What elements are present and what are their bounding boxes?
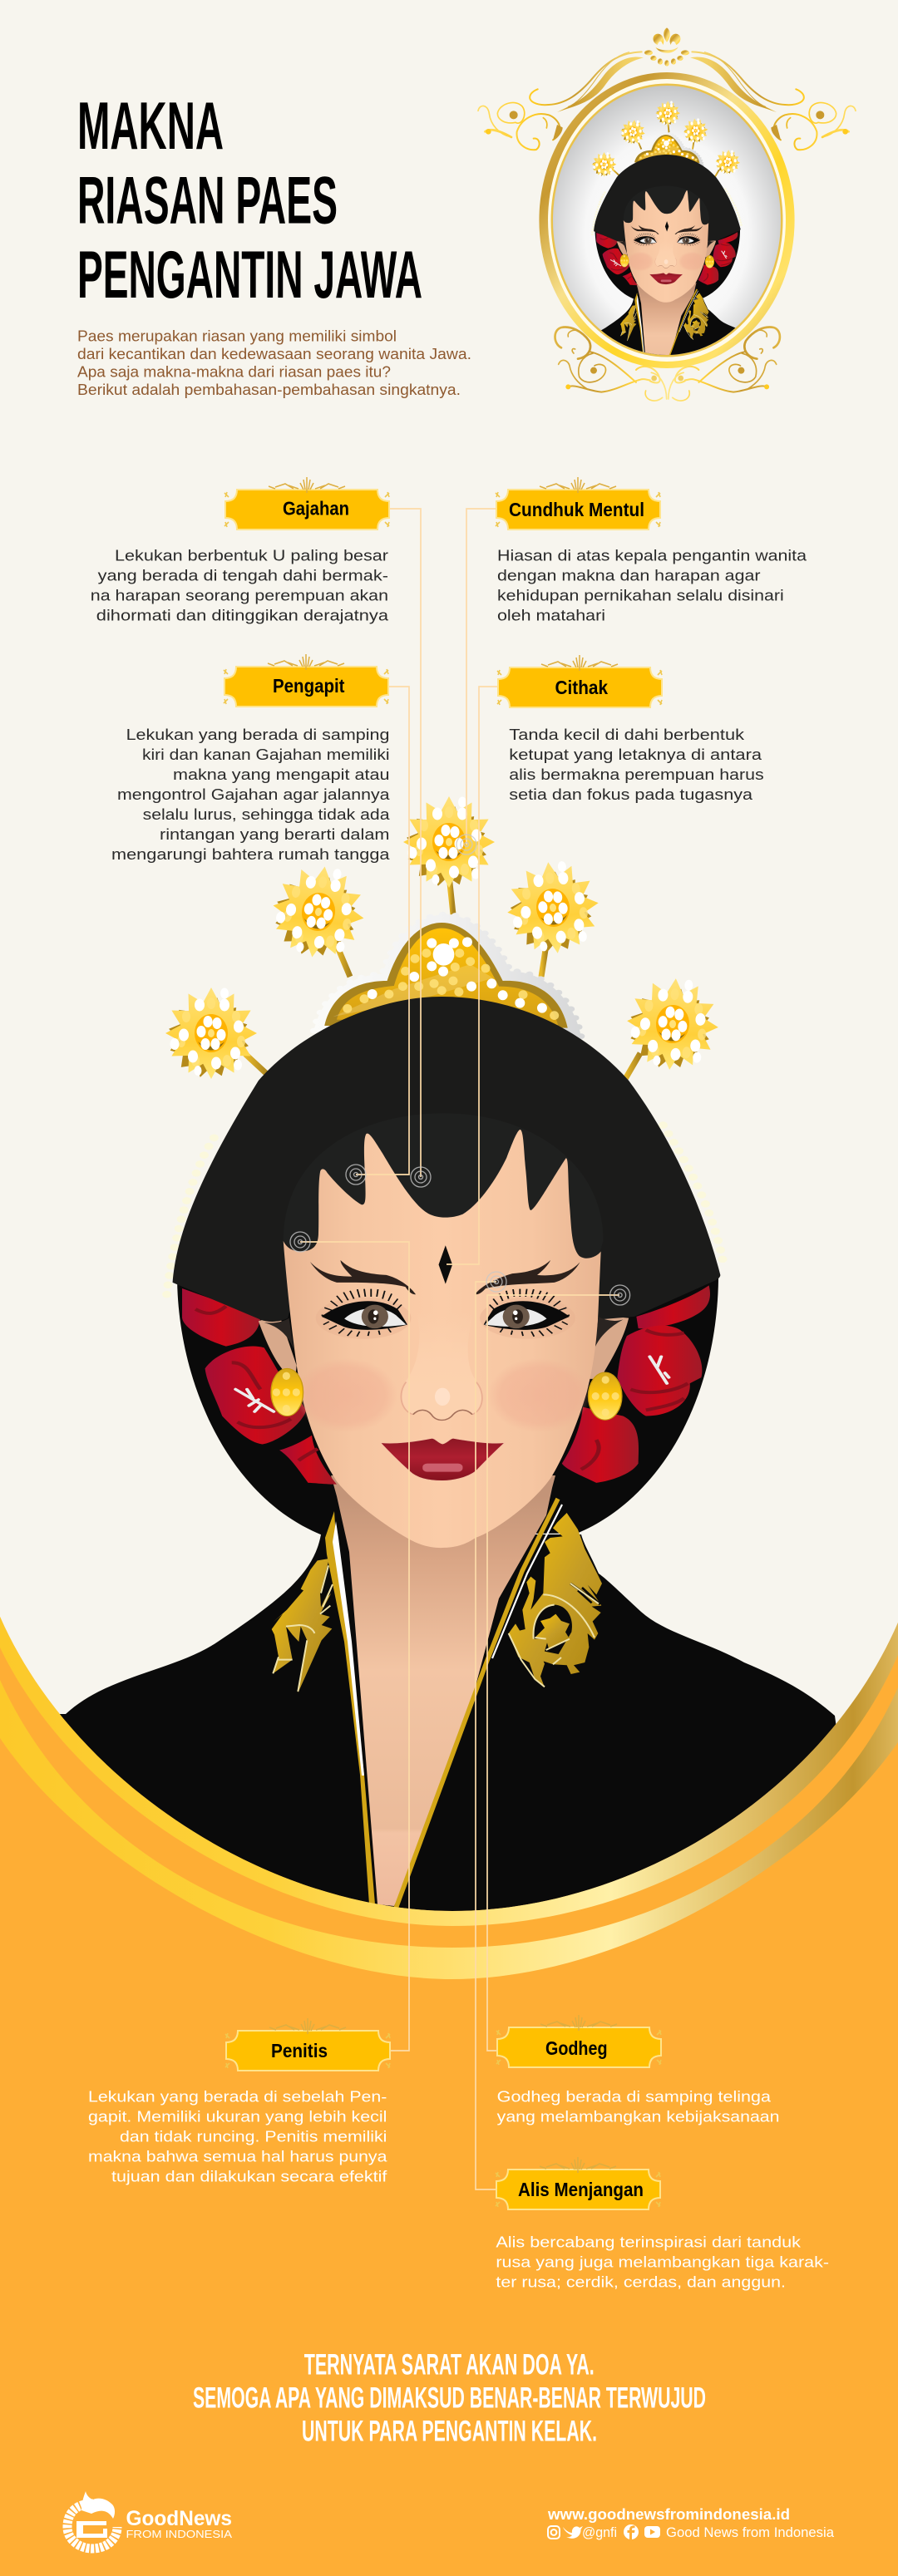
hair ornaments white xyxy=(235,1357,669,1411)
kebaya body xyxy=(33,1534,865,1945)
logo text: GoodNews xyxy=(126,2507,232,2530)
penitis text: tujuan dan dilakukan secara efektif xyxy=(111,2168,387,2184)
back hair bun xyxy=(177,1273,718,1534)
alis menjangan badge xyxy=(496,2157,660,2209)
gajahan text: dihormati dan ditinggikan derajatnya xyxy=(96,607,389,624)
cithak badge: Cithak xyxy=(555,677,608,698)
pale beads behind hair xyxy=(167,1125,724,1294)
godheg badge: Godheg xyxy=(545,2037,607,2059)
alis menjangan text: rusa yang juga melambangkan tiga karak- xyxy=(496,2253,829,2271)
oval portrait frame xyxy=(478,27,856,409)
penitis text: Lekukan yang berada di sebelah Pen- xyxy=(88,2088,387,2105)
footer links: @gnfi xyxy=(582,2524,617,2540)
gold crown xyxy=(313,914,581,1037)
godheg text: Godheg berada di samping telinga xyxy=(497,2088,772,2105)
title: PENGANTIN JAWA xyxy=(77,238,422,313)
pengapit text: Lekukan yang berada di samping xyxy=(126,726,389,743)
panel: godheg xyxy=(496,2015,780,2125)
cundhuk mentul badge: Cundhuk Mentul xyxy=(509,499,644,520)
alis menjangan text: ter rusa; cerdik, cerdas, dan anggun. xyxy=(496,2273,786,2291)
gajahan text: na harapan seorang perempuan akan xyxy=(91,587,388,604)
godheg text: yang melambangkan kebijaksanaan xyxy=(497,2108,780,2125)
headdress stems xyxy=(245,875,640,1079)
cundhuk mentul badge xyxy=(496,477,660,529)
gold collar embroidery xyxy=(272,1513,602,1693)
alis menjangan text xyxy=(496,2234,829,2291)
cithak text xyxy=(509,726,764,803)
panel: alis menjangan xyxy=(496,2157,829,2291)
closing message: UNTUK PARA PENGANTIN KELAK. xyxy=(302,2416,597,2448)
gold curved band upper xyxy=(0,1617,898,1926)
icon: youtube xyxy=(644,2526,660,2538)
brows xyxy=(310,1260,416,1294)
pengapit text: mengarungi bahtera rumah tangga xyxy=(111,845,390,863)
logo text xyxy=(126,2507,232,2540)
gajahan text: yang berada di tengah dahi bermak- xyxy=(98,567,388,584)
pengapit text: mengontrol Gajahan agar jalannya xyxy=(117,786,390,803)
cundhuk mentul text: dengan makna dan harapan agar xyxy=(497,567,760,584)
panel: gajahan xyxy=(91,477,389,624)
ear wisps xyxy=(264,1317,623,1351)
penitis text xyxy=(88,2088,387,2184)
penitis badge: Penitis xyxy=(271,2040,328,2061)
connector target rings xyxy=(290,835,630,1305)
gajahan badge: Gajahan xyxy=(283,497,349,519)
pengapit text: selalu lurus, sehingga tidak ada xyxy=(143,805,390,823)
cithak text: ketupat yang letaknya di antara xyxy=(509,746,762,763)
hair bob xyxy=(173,997,720,1322)
logo text: FROM INDONESIA xyxy=(126,2528,232,2540)
footer links: Good News from Indonesia xyxy=(666,2524,835,2540)
panel: cithak xyxy=(497,655,764,803)
bride portrait xyxy=(33,796,865,1945)
intro text xyxy=(77,328,471,398)
penitis text: gapit. Memiliki ukuran yang lebih kecil xyxy=(88,2108,387,2125)
nose xyxy=(401,1313,482,1420)
left collar xyxy=(272,1559,333,1693)
penitis text: dan tidak runcing. Penitis memiliki xyxy=(120,2128,387,2145)
cundhuk mentul flowers xyxy=(160,796,722,1086)
gold rings xyxy=(539,72,795,368)
cundhuk mentul text: kehidupan pernikahan selalu disinari xyxy=(497,587,784,604)
oval inner xyxy=(553,86,781,355)
pengapit badge: Pengapit xyxy=(273,675,345,697)
logo: good news from indonesia xyxy=(67,2491,232,2549)
intro text: Paes merupakan riasan yang memiliki simbol xyxy=(77,328,397,344)
roses xyxy=(182,1285,710,1485)
intro text: Berikut adalah pembahasan-pembahasan singkatnya. xyxy=(77,382,461,398)
pengapit text: rintangan yang berarti dalam xyxy=(160,825,389,843)
cithak diamond xyxy=(439,1245,452,1284)
cundhuk mentul text xyxy=(497,547,807,624)
godheg badge xyxy=(496,2015,661,2067)
blush xyxy=(294,1358,397,1432)
neck xyxy=(331,1475,555,1906)
gold scroll ornaments xyxy=(478,27,856,401)
icon: instagram xyxy=(548,2526,560,2539)
penitis badge xyxy=(225,2018,390,2071)
alis menjangan text: Alis bercabang terinspirasi dari tanduk xyxy=(496,2234,802,2251)
collar trims xyxy=(325,1499,562,1909)
panel: pengapit xyxy=(111,654,390,863)
pengapit text: kiri dan kanan Gajahan memiliki xyxy=(142,746,389,763)
alis menjangan badge: Alis Menjangan xyxy=(518,2179,644,2200)
ears xyxy=(259,1315,297,1381)
footer links xyxy=(547,2506,835,2540)
earrings xyxy=(271,1368,303,1416)
gajahan badge xyxy=(224,477,389,529)
icon: facebook xyxy=(624,2524,639,2539)
gold curved band lower xyxy=(0,1680,898,1979)
title: MAKNA xyxy=(77,89,224,164)
orange lower background xyxy=(0,1617,898,2576)
cithak badge xyxy=(497,655,662,707)
hair sheen xyxy=(284,1113,603,1258)
penitis text: makna bahwa semua hal harus punya xyxy=(88,2148,387,2165)
icon: garuda ring xyxy=(67,2491,117,2549)
cithak text: alis bermakna perempuan harus xyxy=(509,766,764,783)
title: RIASAN PAES xyxy=(77,164,338,239)
closing message: TERNYATA SARAT AKAN DOA YA. xyxy=(304,2349,595,2381)
cundhuk mentul text: oleh matahari xyxy=(497,607,605,624)
godheg text xyxy=(497,2088,780,2125)
pengapit text: makna yang mengapit atau xyxy=(173,766,389,783)
pengapit badge xyxy=(224,654,388,707)
lips xyxy=(381,1438,505,1480)
intro text: Apa saja makna-makna dari riasan paes itu? xyxy=(77,364,391,381)
cithak text: setia dan fokus pada tugasnya xyxy=(509,786,753,803)
closing message xyxy=(193,2349,706,2448)
face xyxy=(284,1130,601,1548)
right collar xyxy=(509,1513,602,1687)
title xyxy=(77,89,422,313)
panel: cundhuk mentul xyxy=(496,477,807,624)
mini portrait xyxy=(590,101,743,355)
intro text: dari kecantikan dan kedewasaan seorang wanita Jawa. xyxy=(77,346,471,362)
cithak text: Tanda kecil di dahi berbentuk xyxy=(509,726,745,743)
connector lines xyxy=(300,509,619,2189)
eyes xyxy=(316,1289,411,1339)
panel: penitis xyxy=(88,2018,390,2184)
pengapit text xyxy=(111,726,390,863)
footer links: www.goodnewsfromindonesia.id xyxy=(547,2506,790,2523)
cundhuk mentul text: Hiasan di atas kepala pengantin wanita xyxy=(497,547,807,564)
hair, face and roses xyxy=(167,997,724,1548)
gajahan text xyxy=(91,547,389,624)
gajahan text: Lekukan berbentuk U paling besar xyxy=(115,547,388,564)
icon: twitter xyxy=(563,2526,583,2539)
